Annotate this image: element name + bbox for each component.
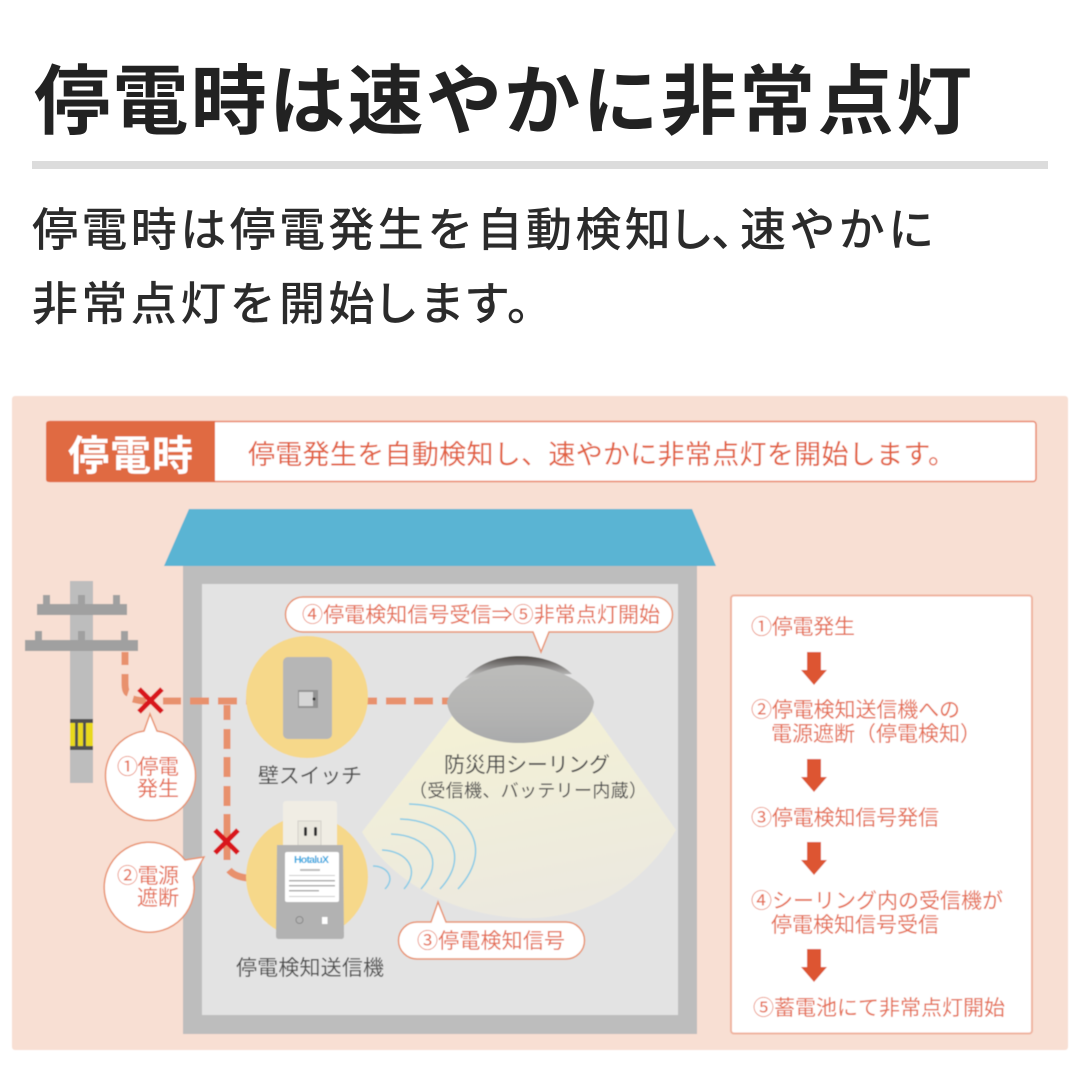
house bbox=[164, 509, 716, 1034]
utility pole bbox=[25, 581, 138, 783]
icon: power-failure detection transmitter bbox=[246, 801, 368, 939]
arrow: step 3 to 4 bbox=[801, 842, 827, 875]
icon: ceiling light bbox=[447, 656, 594, 743]
label: transmitter: 停電検知送信機 bbox=[236, 957, 384, 980]
label: ceiling light bbox=[409, 754, 647, 801]
label: ceiling light: （受信機、バッテリー内蔵） bbox=[409, 781, 647, 801]
subtitle text: 非常点灯を開始 bbox=[32, 278, 378, 330]
arrow: step 2 to 3 bbox=[801, 759, 827, 792]
step 3: ③停電検知信号発信 bbox=[751, 807, 939, 830]
signal waves bbox=[373, 804, 476, 889]
step 4: ④シーリング内の受信機が bbox=[751, 890, 1003, 913]
arrow: step 4 to 5 bbox=[801, 949, 827, 982]
callout: outage occurs: 発生 bbox=[137, 778, 179, 801]
callout: outage occurs: ①停電 bbox=[117, 756, 179, 779]
panel: power outage diagram bbox=[12, 396, 1068, 1050]
light cone bbox=[362, 712, 676, 918]
callout: signal reception and emergency lighting: ④停電検知信号受信⇒⑤非常点灯開始 bbox=[302, 604, 660, 627]
title underline bbox=[32, 161, 1048, 169]
subtitle text: 速やかに bbox=[740, 204, 938, 256]
panel: process steps bbox=[731, 596, 1032, 1034]
banner heading bbox=[46, 421, 1036, 482]
subtitle text: し bbox=[668, 204, 714, 256]
arrow: step 1 to 2 bbox=[801, 652, 827, 685]
dashed power line bbox=[125, 652, 450, 878]
subtitle text bbox=[32, 204, 938, 330]
callout: power cut: ②電源 bbox=[117, 865, 179, 888]
step 1: ①停電発生 bbox=[751, 616, 855, 639]
callout: signal reception and emergency lighting bbox=[286, 597, 672, 652]
subtitle text: ま bbox=[419, 278, 465, 330]
red cross: line cut at transmitter bbox=[215, 830, 238, 853]
title: 停電時は速やかに非常点灯 bbox=[34, 60, 972, 145]
banner heading: 停電時 bbox=[68, 433, 193, 479]
subtitle text: し bbox=[373, 278, 419, 330]
callout: detection signal bbox=[398, 902, 584, 959]
icon: wall switch bbox=[246, 636, 368, 758]
callout: detection signal: ③停電検知信号 bbox=[417, 930, 565, 953]
subtitle text: 停電時は停電発生を自動検知 bbox=[32, 204, 674, 256]
step 4 bbox=[751, 890, 1003, 937]
callout: power cut bbox=[104, 842, 204, 932]
step 2 bbox=[751, 699, 981, 746]
step 2: 電源遮断（停電検知） bbox=[771, 723, 981, 746]
subtitle text: 、 bbox=[711, 204, 757, 256]
banner heading: 停電発生を自動検知し、速やかに非常点灯を開始します。 bbox=[248, 440, 955, 470]
subtitle text: す bbox=[464, 278, 510, 330]
subtitle text: 。 bbox=[507, 278, 553, 330]
panel background bbox=[12, 396, 1068, 1050]
red cross: line cut at pole bbox=[139, 689, 162, 712]
callout: power cut: 遮断 bbox=[137, 887, 179, 910]
icon: power-failure detection transmitter: HotaluX bbox=[294, 854, 329, 866]
step 5: ⑤蓄電池にて非常点灯開始 bbox=[753, 997, 1005, 1020]
label: wall switch: 壁スイッチ bbox=[258, 765, 362, 788]
step 2: ②停電検知送信機への bbox=[751, 699, 960, 722]
callout: outage occurs bbox=[106, 714, 195, 821]
step 4: 停電検知信号受信 bbox=[771, 914, 939, 937]
label: ceiling light: 防災用シーリング bbox=[444, 754, 610, 777]
